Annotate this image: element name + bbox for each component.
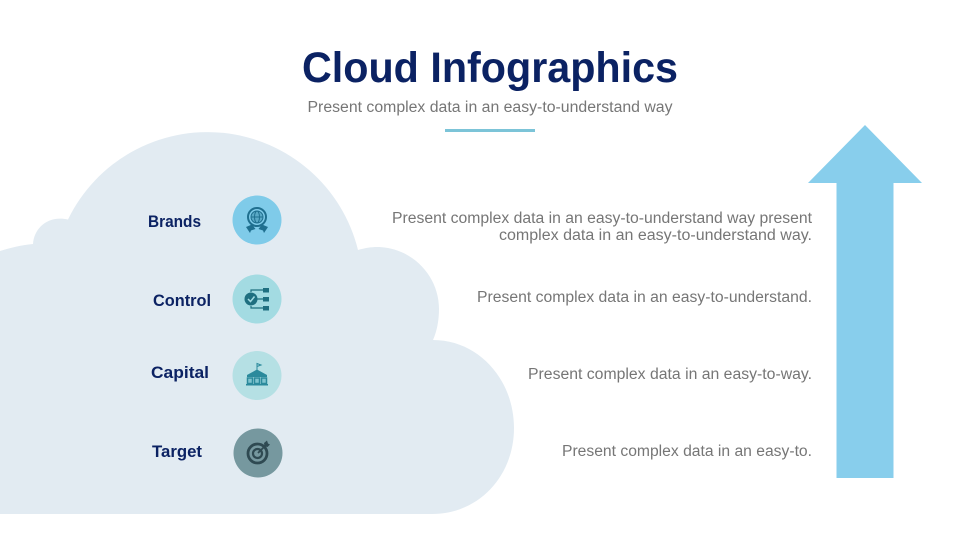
label: Brands: Brands xyxy=(148,212,201,231)
row: Target xyxy=(152,428,812,478)
description: Capital: Present complex data in an easy-to-way. xyxy=(528,366,812,383)
row: Control xyxy=(153,274,812,324)
icon: institution building xyxy=(232,351,282,400)
description: Brands xyxy=(392,210,813,244)
label: Control: Control xyxy=(153,291,211,310)
icon: globe award badge xyxy=(232,196,282,244)
row: Brands xyxy=(148,196,813,244)
description: Control: Present complex data in an easy-to-understand. xyxy=(477,289,812,306)
label: Capital: Capital xyxy=(151,363,209,382)
description: Brands: Present complex data in an easy-to-understand way present xyxy=(392,210,813,227)
row: Capital xyxy=(151,351,812,400)
label: Target: Target xyxy=(152,442,202,461)
title underline xyxy=(445,129,535,132)
description: Target: Present complex data in an easy-to. xyxy=(562,443,812,460)
icon: target with dart xyxy=(234,428,282,478)
description: Brands: complex data in an easy-to-understand way. xyxy=(499,227,812,244)
arrow: upward growth xyxy=(808,125,922,478)
icon: flow checklist xyxy=(232,274,282,324)
subtitle: Present complex data in an easy-to-understand way xyxy=(308,99,673,116)
cloud shape xyxy=(0,132,514,514)
title: Cloud Infographics xyxy=(302,44,678,92)
